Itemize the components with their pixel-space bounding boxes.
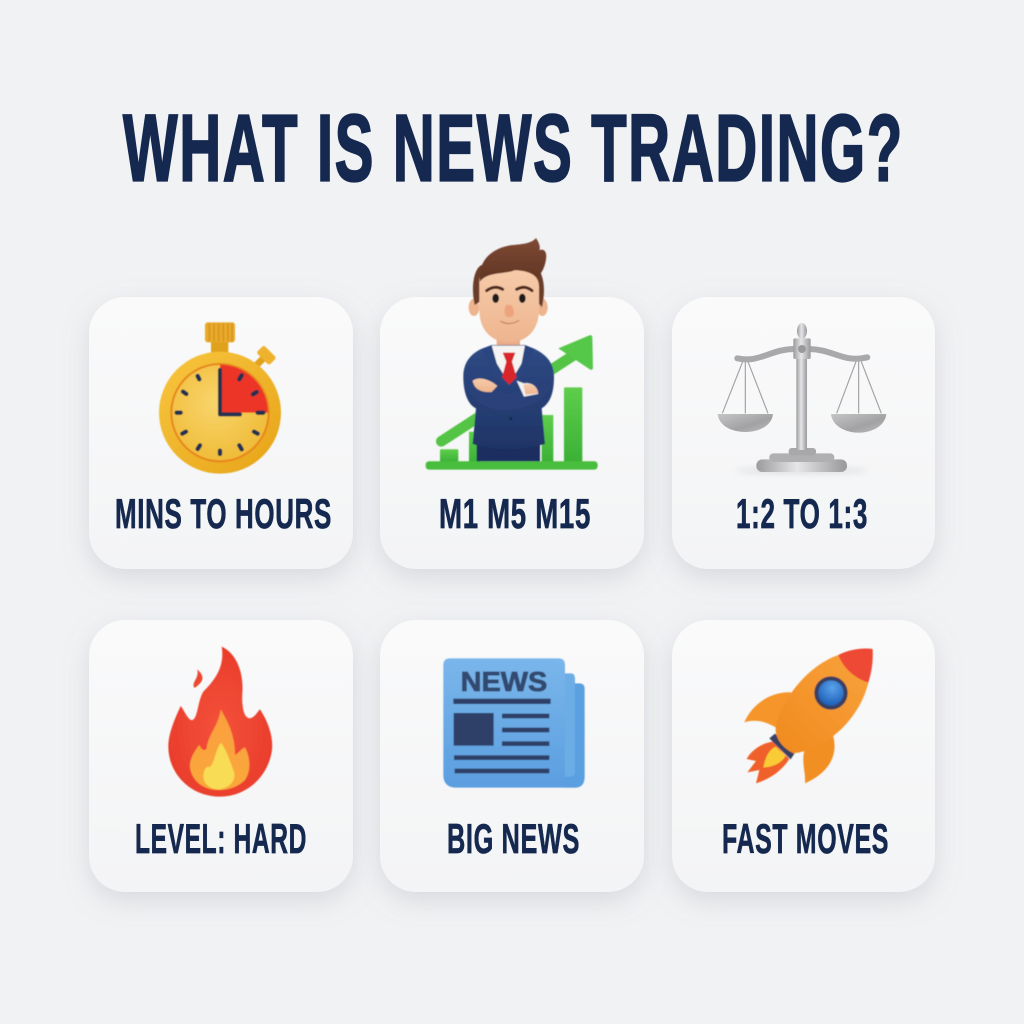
icon: stopwatch	[159, 322, 281, 474]
icon: flame	[168, 647, 272, 797]
card background	[380, 620, 644, 892]
card background	[89, 297, 353, 569]
icon: trader with rising chart	[426, 238, 598, 470]
icon: newspaper: NEWS	[461, 666, 547, 697]
panel: mins to hours	[89, 297, 353, 569]
icon: balance scale	[718, 323, 886, 473]
panel: fast moves	[672, 620, 935, 892]
panel: timeframes	[380, 238, 644, 569]
label: MINS TO HOURS	[115, 490, 332, 537]
card background	[89, 620, 353, 892]
card background	[672, 620, 935, 892]
panel: risk reward	[672, 297, 935, 569]
label: 1:2 TO 1:3	[736, 490, 868, 537]
panel: level hard	[89, 620, 353, 892]
label: LEVEL: HARD	[135, 815, 307, 862]
label: BIG NEWS	[447, 815, 580, 862]
panel: big news	[380, 620, 644, 892]
icon: rocket	[744, 649, 873, 783]
label: FAST MOVES	[722, 815, 889, 862]
icon: newspaper	[443, 658, 585, 788]
card background	[672, 297, 935, 569]
label: M1 M5 M15	[439, 490, 591, 537]
card background	[380, 297, 644, 569]
